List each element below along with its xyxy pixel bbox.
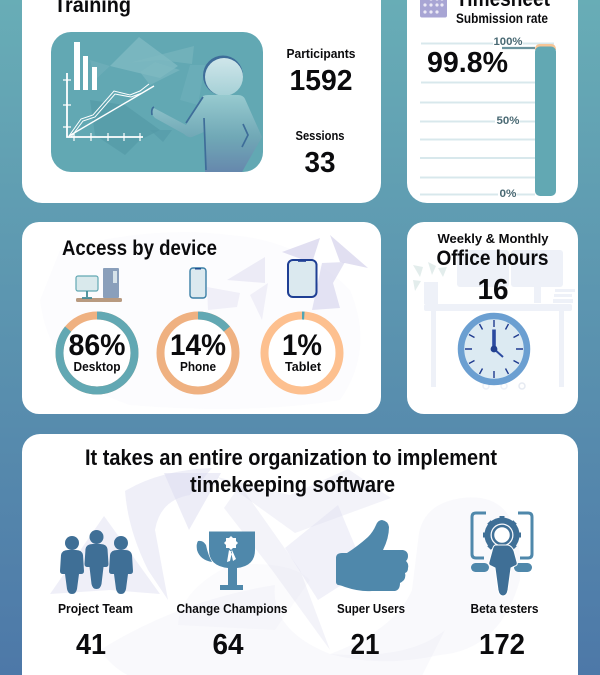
bar gauge chart (420, 35, 556, 200)
icon: phone (190, 268, 206, 298)
donut chart: tablet (264, 316, 340, 390)
stat: 21: 21 (350, 629, 380, 661)
stat: participants (286, 46, 356, 97)
donut chart: phone: 14% (170, 329, 226, 362)
stat: 172: 172 (479, 629, 525, 661)
watermark: lavender ribbons (50, 468, 444, 662)
heading: access by device: Access by device (62, 237, 217, 260)
panel: access by device (22, 222, 381, 414)
icon: trophy (197, 532, 255, 590)
donut chart: desktop (60, 316, 134, 390)
stat: 64: 64 (212, 629, 244, 661)
icon: beta tester with gear (471, 513, 532, 596)
bar chart icon (74, 42, 97, 90)
donut chart: phone: Phone (180, 359, 216, 374)
stat: participants: Participants (286, 46, 356, 61)
donut chart: tablet: Tablet (285, 359, 322, 374)
text: change champions: Change Champions (176, 601, 288, 616)
illustration: presenter with charts (51, 32, 263, 172)
watermark: lavender shards (40, 232, 368, 409)
stat: sessions: Sessions (296, 128, 344, 143)
panel: organization (22, 434, 578, 675)
bar gauge chart: 100% (494, 36, 523, 48)
heading: office hours: Office hours (436, 247, 548, 270)
text: super users: Super Users (337, 601, 405, 616)
watermark: desk scene (413, 250, 575, 389)
stat: sessions: 33 (304, 147, 336, 179)
text: beta testers: Beta testers (470, 601, 538, 616)
heading: organization statement: timekeeping software (190, 472, 395, 497)
stat: 16: 16 (478, 274, 508, 306)
person silhouette (152, 56, 262, 172)
icon: tablet (288, 260, 316, 297)
panel: timesheet (407, 0, 578, 203)
line chart icon (63, 73, 154, 141)
heading: organization statement (85, 445, 498, 497)
subheading: submission rate: Submission rate (456, 11, 548, 26)
bar gauge chart: 0% (500, 188, 517, 200)
bar gauge chart: 50% (496, 115, 520, 127)
icon: clock (461, 316, 527, 382)
stat: participants: 1592 (290, 65, 352, 97)
icon: desktop computer (76, 268, 122, 302)
panel: office hours (407, 222, 578, 414)
heading: organization statement: It takes an entire organization to implement (85, 445, 498, 470)
stat: 99.8%: 99.8% (427, 47, 508, 79)
donut chart: tablet: 1% (282, 329, 322, 362)
icon: thumbs up (336, 520, 408, 591)
subheading: weekly and monthly: Weekly & Monthly (438, 231, 549, 246)
icon: calendar (420, 0, 447, 18)
stat: sessions (296, 128, 344, 179)
donut chart: desktop: 86% (68, 329, 126, 362)
text: project team: Project Team (58, 601, 133, 616)
donut chart: phone (160, 316, 236, 390)
donut chart: desktop: Desktop (74, 359, 121, 374)
panel: training (22, 0, 381, 203)
stat: 41: 41 (76, 629, 106, 661)
icon: project team (60, 530, 133, 594)
